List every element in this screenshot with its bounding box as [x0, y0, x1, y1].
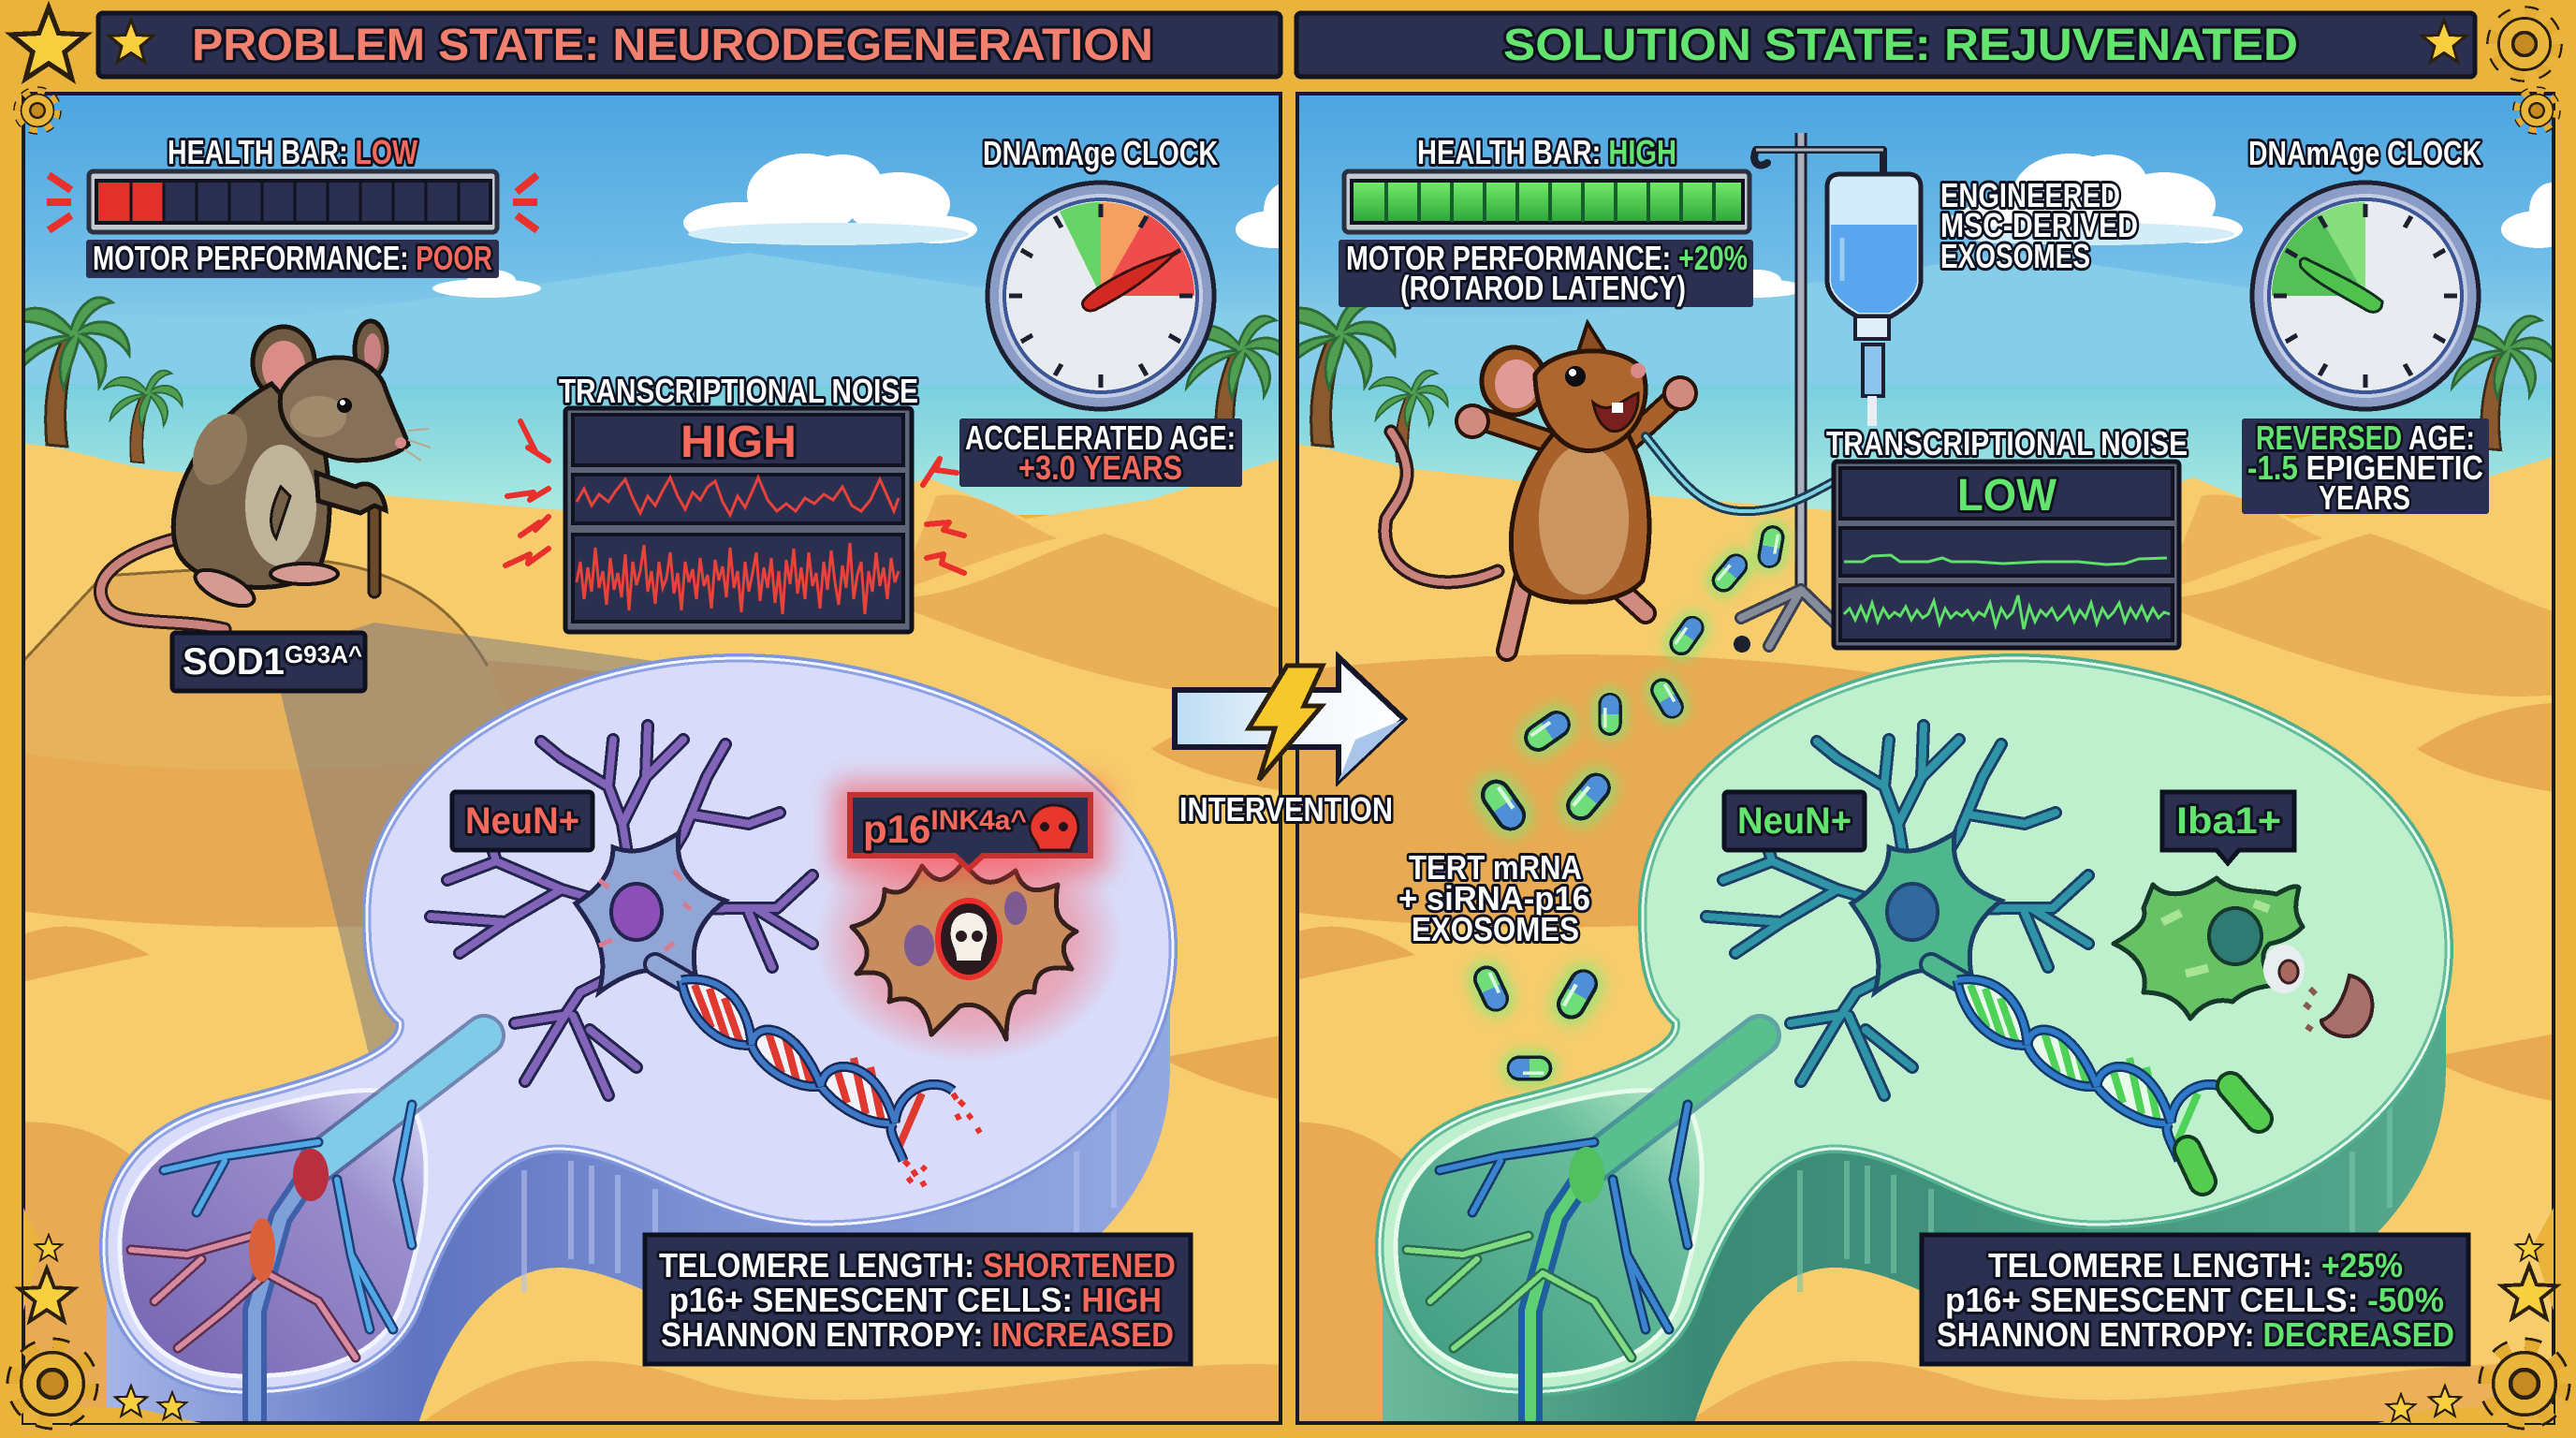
- accelerated age callout: +3.0 YEARS: [1018, 448, 1182, 487]
- engineered exosomes label: EXOSOMES: [1940, 237, 2090, 275]
- magnifier lens: problem: [107, 661, 1170, 1423]
- intervention label: INTERVENTION: [1179, 790, 1393, 829]
- noise wave: lower: [577, 543, 899, 614]
- noise wave: quiet: [1844, 595, 2170, 629]
- engineered exosomes label: [1940, 176, 2138, 275]
- motor performance: improved: MOTOR PERFORMANCE: +20%: [1346, 239, 1748, 277]
- motor performance: poor: MOTOR PERFORMANCE: POOR: [93, 239, 492, 277]
- panel: problem state scene: [0, 94, 1310, 1438]
- statistics panel: problem: p16+ SENESCENT CELLS: HIGH: [669, 1281, 1162, 1319]
- SOD1 G93A label: SOD1: [183, 641, 285, 682]
- senescent cell with skull: [821, 858, 1118, 1058]
- blood vessel window: [120, 1035, 484, 1418]
- DNA helix: damaged: [681, 979, 980, 1186]
- health bar: low: HEALTH BAR: LOW: [168, 133, 417, 171]
- p16 label with skull: p16: [863, 807, 930, 851]
- icon: small gear top right: [2518, 92, 2555, 129]
- noise wave: upper: [577, 477, 899, 515]
- intervention arrow: [1175, 657, 1404, 781]
- reversed age callout: REVERSED AGE:: [2256, 418, 2475, 457]
- p16 label with skull: [833, 782, 1108, 875]
- panel: solution state scene: [1266, 94, 2576, 1438]
- transcriptional noise panel: low: TRANSCRIPTIONAL NOISE: [1826, 424, 2188, 462]
- microglia cell with debris: [2114, 878, 2372, 1036]
- SOD1 G93A label: [172, 633, 365, 691]
- header: problem state: PROBLEM STATE: NEURODEGENERATION: [192, 21, 1153, 70]
- header: solution state: SOLUTION STATE: REJUVENATED: [1503, 21, 2298, 70]
- transcriptional noise panel: high: TRANSCRIPTIONAL NOISE: [559, 372, 918, 410]
- icon: small gear top left: [19, 92, 56, 129]
- NeuN label: problem: [452, 792, 593, 850]
- mouse: rejuvenated jumping: [1385, 323, 1696, 651]
- magnifier beam: [281, 623, 651, 1052]
- motor performance: improved: [1339, 239, 1753, 307]
- DNAmAge clock: accelerated: [983, 134, 1218, 409]
- statistics panel: solution: p16+ SENESCENT CELLS: -50%: [1945, 1281, 2444, 1319]
- therapy label: TERT mRNA: [1409, 848, 1582, 887]
- transcriptional noise panel: low: LOW: [1957, 471, 2057, 521]
- statistics panel: problem: TELOMERE LENGTH: SHORTENED: [659, 1246, 1176, 1284]
- therapy label: EXOSOMES: [1412, 910, 1579, 948]
- exosome capsules: [1463, 519, 1791, 1085]
- DNAmAge clock: reversed: DNAmAge CLOCK: [2248, 134, 2481, 172]
- neuron: problem: [431, 726, 812, 1095]
- header: solution state: [1296, 13, 2475, 77]
- icon: gear top right: [2495, 14, 2554, 74]
- red noise sparks: [505, 421, 964, 573]
- health bar: high: [1344, 133, 1749, 232]
- Iba1 label: Iba1+: [2176, 800, 2281, 842]
- ornament: bottom right: [2378, 1208, 2561, 1423]
- transcriptional noise panel: high: HIGH: [681, 418, 797, 467]
- Iba1 label: [2162, 792, 2294, 863]
- statistics panel: solution: [1922, 1235, 2468, 1364]
- SOD1 G93A label: G93A^: [285, 640, 362, 668]
- blood vessel window: restored: [1396, 1035, 1760, 1418]
- motor performance: improved: (ROTAROD LATENCY): [1400, 269, 1686, 307]
- header: problem state: [98, 13, 1281, 77]
- engineered exosomes label: ENGINEERED: [1940, 176, 2120, 214]
- DNAmAge clock: accelerated: DNAmAge CLOCK: [983, 134, 1218, 172]
- health bar: high: HEALTH BAR: HIGH: [1417, 133, 1676, 171]
- icon: corner star top left: [11, 7, 86, 79]
- IV tube to mouse: [1646, 436, 1833, 511]
- NeuN label: healthy: NeuN+: [1737, 800, 1852, 842]
- therapy label: + siRNA-p16: [1398, 879, 1590, 917]
- accelerated age callout: ACCELERATED AGE:: [965, 418, 1236, 457]
- reversed age callout: [2242, 418, 2489, 517]
- DNA helix: repaired: [1957, 979, 2259, 1181]
- neuron: healthy: [1706, 726, 2088, 1095]
- therapy label: [1398, 848, 1590, 948]
- statistics panel: problem: SHANNON ENTROPY: INCREASED: [661, 1315, 1174, 1354]
- statistics panel: problem: [645, 1235, 1191, 1364]
- transcriptional noise panel: low: [1826, 424, 2188, 648]
- health bar: low: [47, 133, 537, 232]
- statistics panel: solution: TELOMERE LENGTH: +25%: [1988, 1246, 2403, 1284]
- accelerated age callout: [959, 418, 1242, 487]
- sand mound: [25, 564, 483, 770]
- NeuN label: problem: NeuN+: [465, 800, 579, 842]
- IV stand with bag: [1734, 133, 1921, 653]
- mouse: aged SOD1 with cane: [100, 321, 431, 629]
- mound outline: [23, 562, 487, 665]
- reversed age callout: YEARS: [2319, 478, 2410, 517]
- p16 label with skull: INK4a^: [930, 805, 1027, 836]
- magnifier lens: solution: [1383, 661, 2446, 1423]
- icon: lightning bolt: [1249, 666, 1323, 780]
- DNAmAge clock: reversed: [2248, 134, 2481, 409]
- NeuN label: healthy: [1724, 792, 1865, 850]
- statistics panel: solution: SHANNON ENTROPY: DECREASED: [1937, 1315, 2454, 1354]
- transcriptional noise panel: high: [559, 372, 918, 632]
- reversed age callout: -1.5 EPIGENETIC: [2247, 448, 2483, 487]
- engineered exosomes label: MSC-DERIVED: [1940, 206, 2138, 244]
- ornament: bottom left: [16, 1208, 201, 1423]
- noise wave: flat: [1844, 555, 2167, 565]
